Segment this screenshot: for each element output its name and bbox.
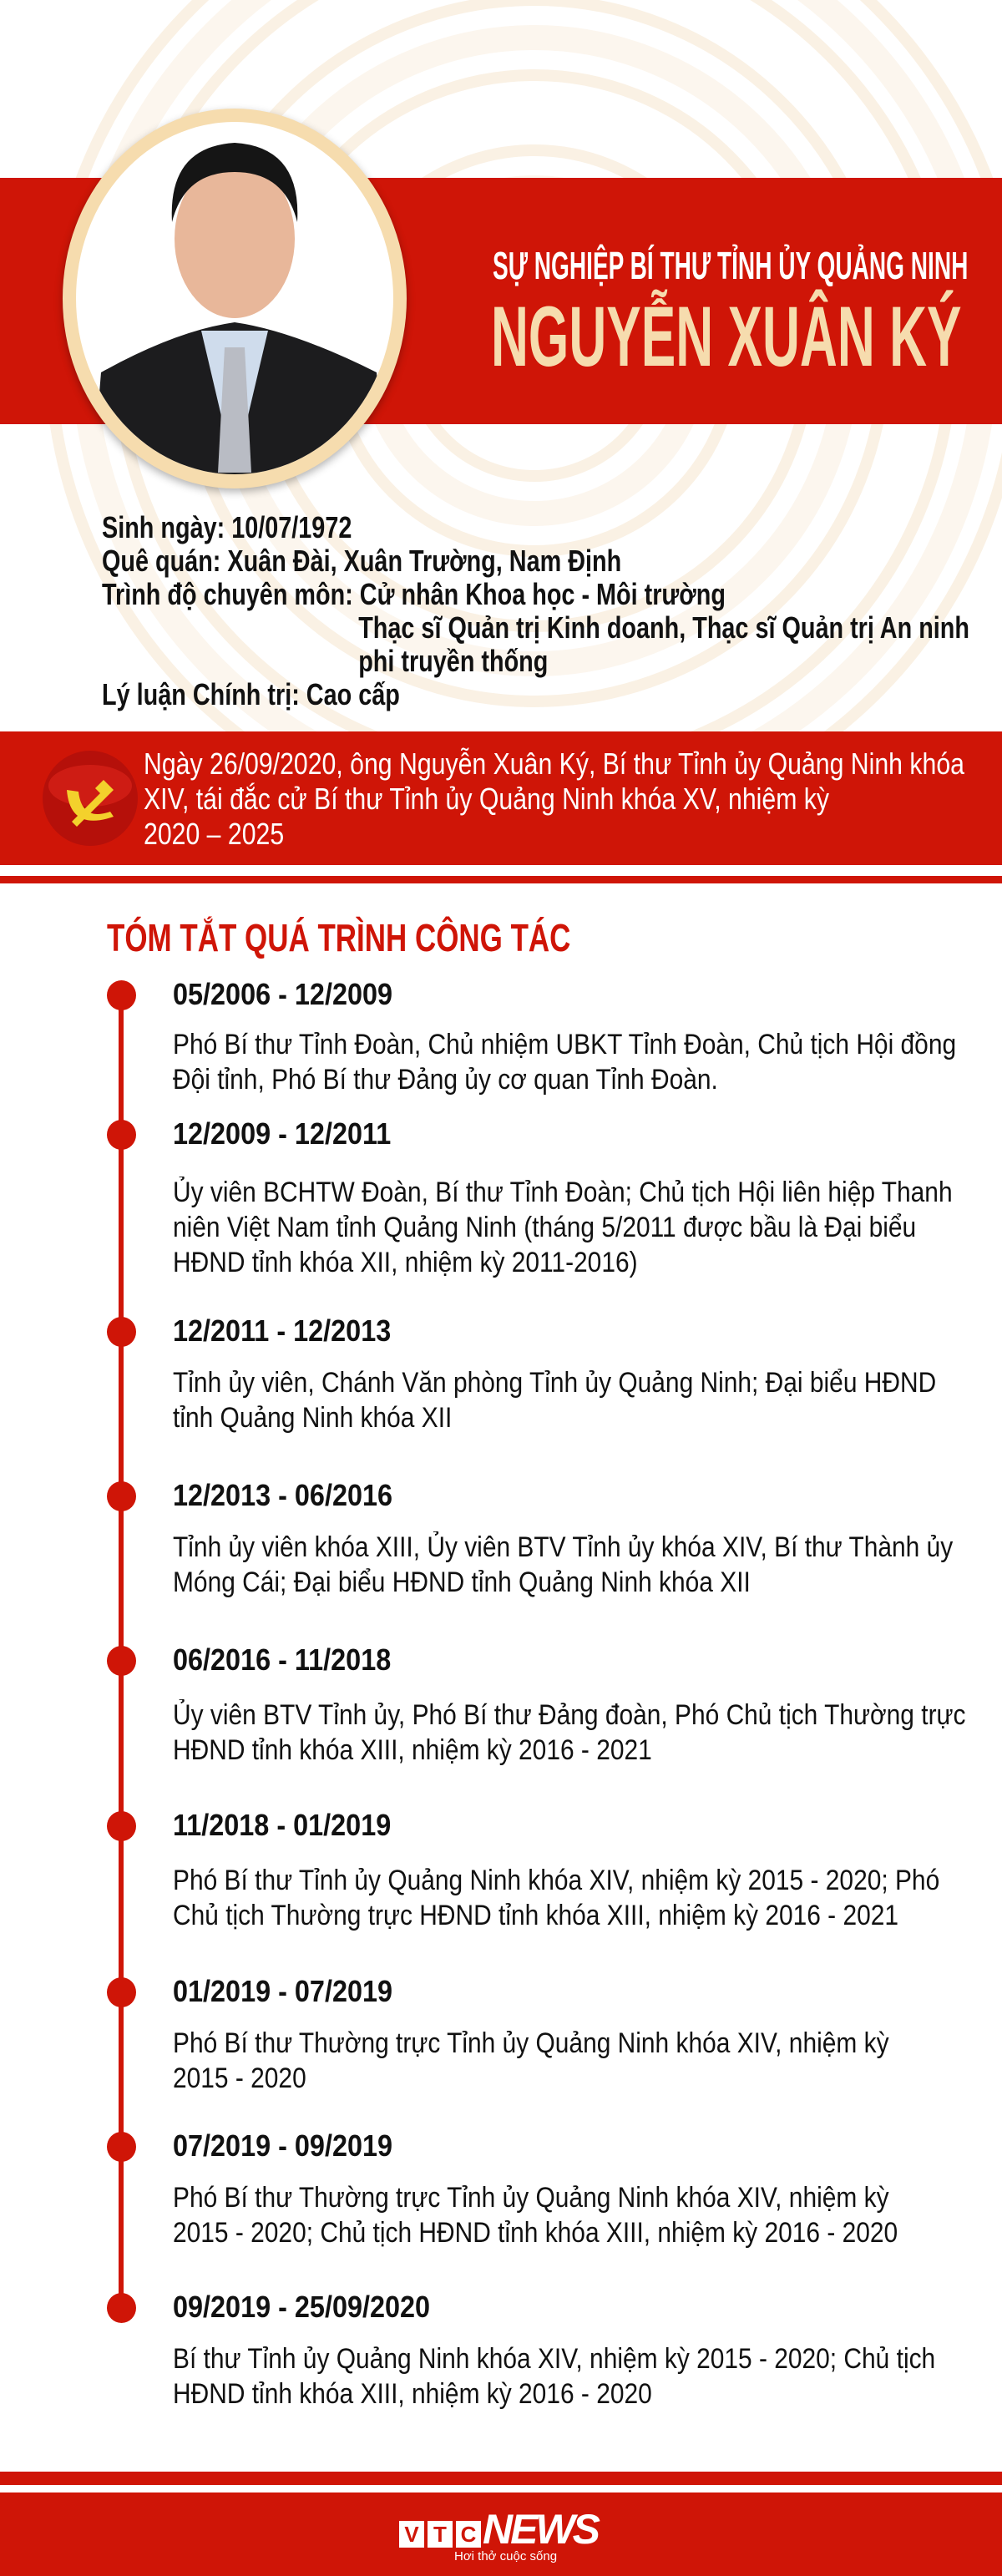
- entry 1: Phó Bí thư Tỉnh Đoàn, Chủ nhiệm UBKT Tỉnh Đoàn, Chủ tịch Hội đồng: [173, 1029, 956, 1060]
- entry 2: [173, 1116, 953, 1278]
- entry 8: Phó Bí thư Thường trực Tỉnh ủy Quảng Ninh khóa XIV, nhiệm kỳ: [173, 2182, 889, 2214]
- entry 7: 2015 - 2020: [173, 2062, 306, 2094]
- entry 6: [173, 1808, 939, 1931]
- title line 1: SỰ NGHIỆP BÍ THƯ TỈNH ỦY QUẢNG NINH: [493, 244, 968, 287]
- entry 8: [173, 2128, 898, 2249]
- entry 2: 12/2009 - 12/2011: [173, 1116, 391, 1151]
- personal info: Trình độ chuyên môn: Cử nhân Khoa học - Môi trường: [102, 577, 726, 611]
- entry 5: 06/2016 - 11/2018: [173, 1642, 391, 1677]
- entry 5: Ủy viên BTV Tỉnh ủy, Phó Bí thư Đảng đoàn, Phó Chủ tịch Thường trực: [173, 1699, 966, 1731]
- entry 1: [173, 977, 956, 1096]
- entry 1: Đội tỉnh, Phó Bí thư Đảng ủy cơ quan Tỉnh Đoàn.: [173, 1064, 718, 1096]
- entry 6: Chủ tịch Thường trực HĐND tỉnh khóa XIII, nhiệm kỳ 2016 - 2021: [173, 1900, 898, 1931]
- re-election banner: [0, 731, 1002, 865]
- entry 6: 11/2018 - 01/2019: [173, 1808, 391, 1842]
- entry 8: 2015 - 2020; Chủ tịch HĐND tỉnh khóa XIII, nhiệm kỳ 2016 - 2020: [173, 2217, 898, 2249]
- entry 3: [173, 1313, 936, 1434]
- announcement text: Ngày 26/09/2020, ông Nguyễn Xuân Ký, Bí thư Tỉnh ủy Quảng Ninh khóa: [144, 746, 964, 781]
- background drum pattern: [50, 0, 1002, 731]
- personal info: [102, 510, 969, 711]
- entry 5: HĐND tỉnh khóa XIII, nhiệm kỳ 2016 - 2021: [173, 1734, 652, 1766]
- entry 4: [173, 1478, 954, 1598]
- entry 2: HĐND tỉnh khóa XII, nhiệm kỳ 2011-2016): [173, 1247, 638, 1278]
- personal info: Quê quán: Xuân Đài, Xuân Trường, Nam Định: [102, 544, 621, 578]
- announcement text: [144, 746, 964, 851]
- entry 2: Ủy viên BCHTW Đoàn, Bí thư Tỉnh Đoàn; Chủ tịch Hội liên hiệp Thanh: [173, 1177, 953, 1208]
- entry 3: tỉnh Quảng Ninh khóa XII: [173, 1402, 452, 1434]
- entry 1: 05/2006 - 12/2009: [173, 977, 392, 1011]
- logo: VTC News: Hơi thở cuộc sống: [454, 2549, 557, 2563]
- logo: VTC News: T: [433, 2522, 447, 2547]
- entry 7: Phó Bí thư Thường trực Tỉnh ủy Quảng Ninh khóa XIV, nhiệm kỳ: [173, 2027, 889, 2059]
- logo: VTC News: V: [404, 2522, 419, 2547]
- entry 9: HĐND tỉnh khóa XIII, nhiệm kỳ 2016 - 2020: [173, 2378, 652, 2410]
- personal info: Thạc sĩ Quản trị Kinh doanh, Thạc sĩ Quản trị An ninh: [358, 610, 969, 645]
- logo: VTC News: C: [461, 2522, 476, 2547]
- entry 8: 07/2019 - 09/2019: [173, 2128, 392, 2163]
- entry 3: 12/2011 - 12/2013: [173, 1313, 391, 1348]
- entry 9: Bí thư Tỉnh ủy Quảng Ninh khóa XIV, nhiệm kỳ 2015 - 2020; Chủ tịch: [173, 2343, 935, 2375]
- entry 2: niên Việt Nam tỉnh Quảng Ninh (tháng 5/2011 được bầu là Đại biểu: [173, 1212, 916, 1243]
- title line 2: NGUYỄN XUÂN KÝ: [491, 289, 962, 384]
- entry 7: 01/2019 - 07/2019: [173, 1974, 392, 2008]
- entry 3: Tỉnh ủy viên, Chánh Văn phòng Tỉnh ủy Quảng Ninh; Đại biểu HĐND: [173, 1367, 936, 1399]
- announcement text: XIV, tái đắc cử Bí thư Tỉnh ủy Quảng Ninh khóa XV, nhiệm kỳ: [144, 782, 829, 816]
- entry 9: [173, 2290, 935, 2410]
- footer: [0, 2492, 1002, 2576]
- entry 4: 12/2013 - 06/2016: [173, 1478, 392, 1512]
- section heading: TÓM TẮT QUÁ TRÌNH CÔNG TÁC: [107, 916, 570, 959]
- personal info: Lý luận Chính trị: Cao cấp: [102, 677, 400, 711]
- entry 4: Móng Cái; Đại biểu HĐND tỉnh Quảng Ninh khóa XII: [173, 1566, 751, 1598]
- icon: party emblem: [43, 751, 138, 846]
- entry 6: Phó Bí thư Tỉnh ủy Quảng Ninh khóa XIV, nhiệm kỳ 2015 - 2020; Phó: [173, 1865, 939, 1896]
- entry 5: [173, 1642, 966, 1766]
- entry 7: [173, 1974, 889, 2094]
- entry 4: Tỉnh ủy viên khóa XIII, Ủy viên BTV Tỉnh ủy khóa XIV, Bí thư Thành ủy: [173, 1531, 953, 1563]
- logo: VTC News: [399, 2506, 600, 2563]
- entry 9: 09/2019 - 25/09/2020: [173, 2290, 430, 2324]
- portrait photo: [63, 109, 407, 488]
- logo: VTC News: NEWS: [483, 2506, 598, 2553]
- title banner: [0, 178, 1002, 424]
- announcement text: 2020 – 2025: [144, 817, 284, 851]
- personal info: phi truyền thống: [358, 644, 548, 678]
- timeline: [107, 980, 136, 2323]
- personal info: Sinh ngày: 10/07/1972: [102, 510, 352, 544]
